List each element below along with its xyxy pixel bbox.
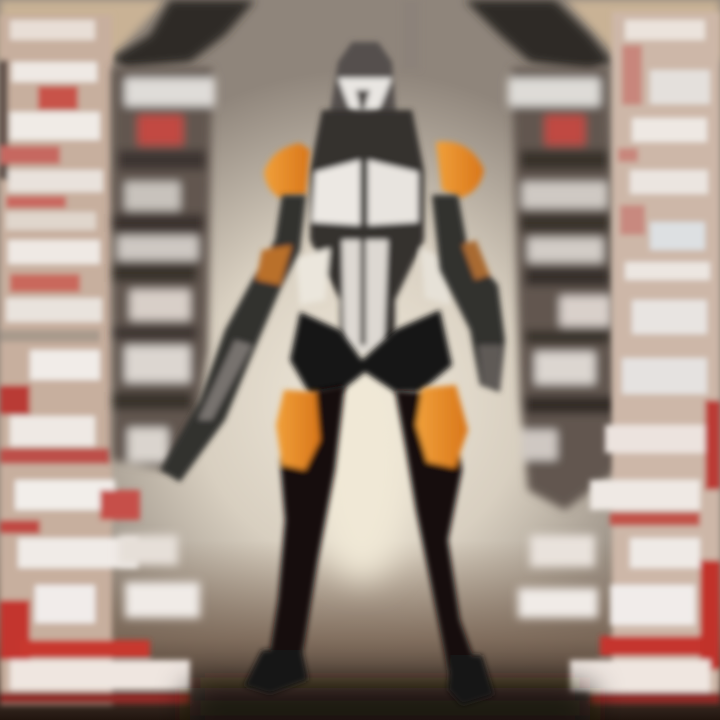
top dark bands (112, 0, 612, 70)
panel: left inner label column (112, 68, 215, 618)
central glow behind figure (312, 360, 412, 580)
figure: orange shoulder left (264, 143, 310, 198)
panel: right outer label column (570, 12, 720, 704)
figure: armored character (160, 0, 505, 705)
figure: head and helmet (330, 0, 420, 140)
figure: pelvis (290, 310, 452, 395)
figure: orange shoulder right (436, 142, 484, 198)
floor shadow (190, 688, 590, 720)
figure: right arm (432, 195, 505, 392)
figure: right leg (395, 385, 494, 705)
panel: right inner label column (508, 68, 618, 618)
figure: left leg (244, 385, 345, 694)
panel: left outer label column (0, 15, 190, 705)
figure: left arm and blade (160, 195, 306, 482)
figure: torso (296, 110, 452, 354)
